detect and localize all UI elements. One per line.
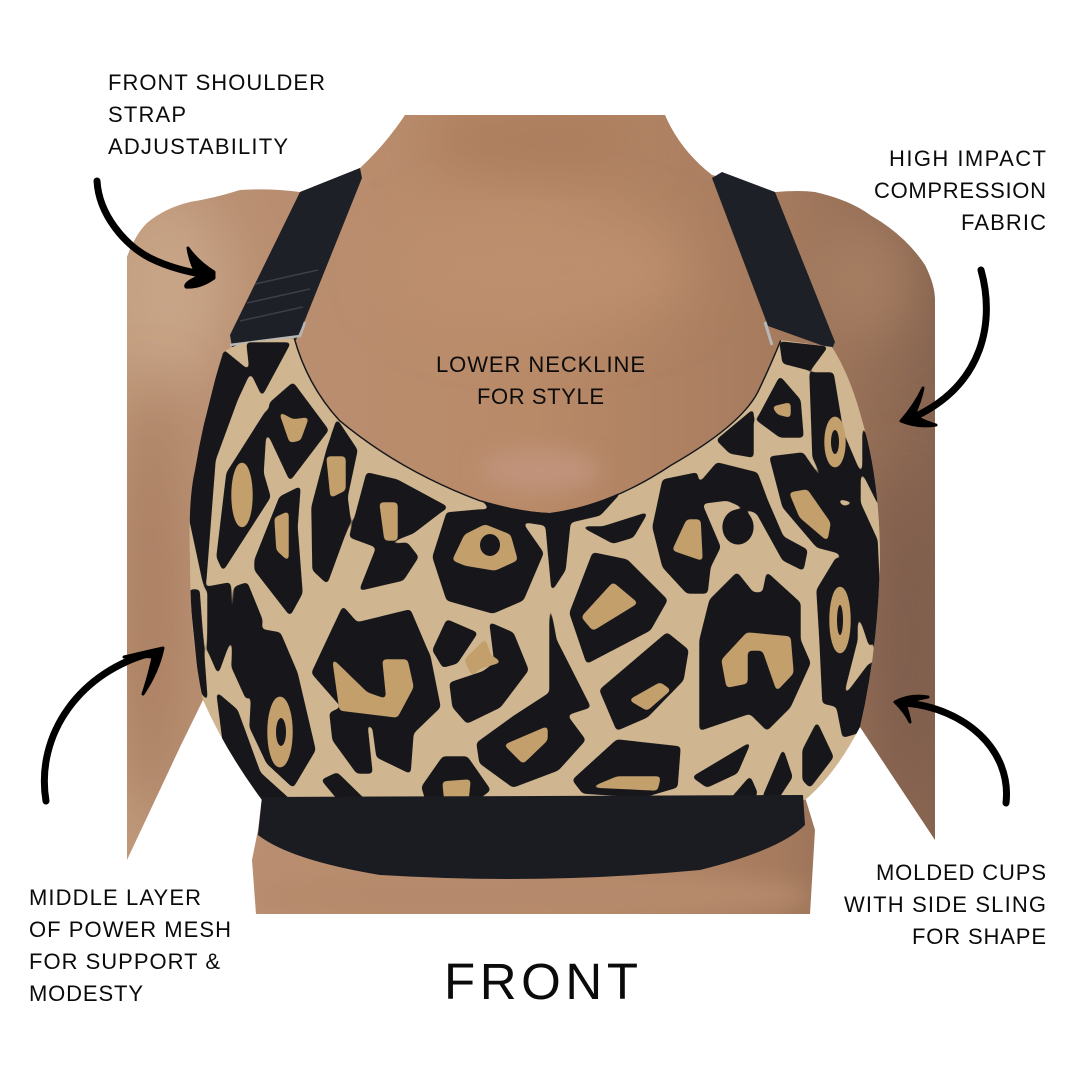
callout text: lower neckline: LOWER NECKLINE <box>436 352 645 377</box>
right shoulder strap <box>712 172 835 349</box>
arrow: to power mesh <box>44 648 163 801</box>
callout text: lower neckline: FOR STYLE <box>477 384 604 409</box>
arrow: to molded cups <box>895 696 1007 803</box>
callout text: middle layer of power mesh: MIDDLE LAYER <box>29 885 201 910</box>
callout text: front shoulder strap adjustability: FRONT SHOULDER <box>108 70 325 95</box>
callout text: front shoulder strap adjustability <box>108 70 325 159</box>
arrow: to compression fabric <box>901 270 986 426</box>
callout text: front shoulder strap adjustability: STRAP <box>108 102 186 127</box>
callout text: lower neckline <box>436 352 645 409</box>
leopard spots <box>190 342 884 810</box>
callout text: middle layer of power mesh <box>29 885 231 1006</box>
callout text: middle layer of power mesh: FOR SUPPORT & <box>29 949 220 974</box>
title: front: FRONT <box>444 953 638 1010</box>
underband <box>258 795 805 879</box>
bra: leopard print cups <box>180 330 890 810</box>
callout text: molded cups with side sling: WITH SIDE SLING <box>844 892 1046 917</box>
left shoulder strap <box>230 168 362 347</box>
neckline binding <box>295 338 780 513</box>
callout text: front shoulder strap adjustability: ADJUSTABILITY <box>108 134 288 159</box>
callout text: high impact compression fabric <box>874 146 1046 235</box>
callout text: high impact compression fabric: HIGH IMPACT <box>889 146 1046 171</box>
callout text: molded cups with side sling <box>844 860 1046 949</box>
callout text: high impact compression fabric: COMPRESSION <box>874 178 1046 203</box>
arrow: to shoulder strap <box>97 181 214 287</box>
photo: torso and arms <box>110 110 940 920</box>
callout text: high impact compression fabric: FABRIC <box>961 210 1046 235</box>
tan rosette centres <box>232 403 850 802</box>
cup base fabric <box>180 330 890 810</box>
dark rosette cores <box>276 430 843 746</box>
callout text: middle layer of power mesh: OF POWER MESH <box>29 917 231 942</box>
callout text: molded cups with side sling: FOR SHAPE <box>912 924 1046 949</box>
callout text: middle layer of power mesh: MODESTY <box>29 981 143 1006</box>
callout text: molded cups with side sling: MOLDED CUPS <box>876 860 1046 885</box>
